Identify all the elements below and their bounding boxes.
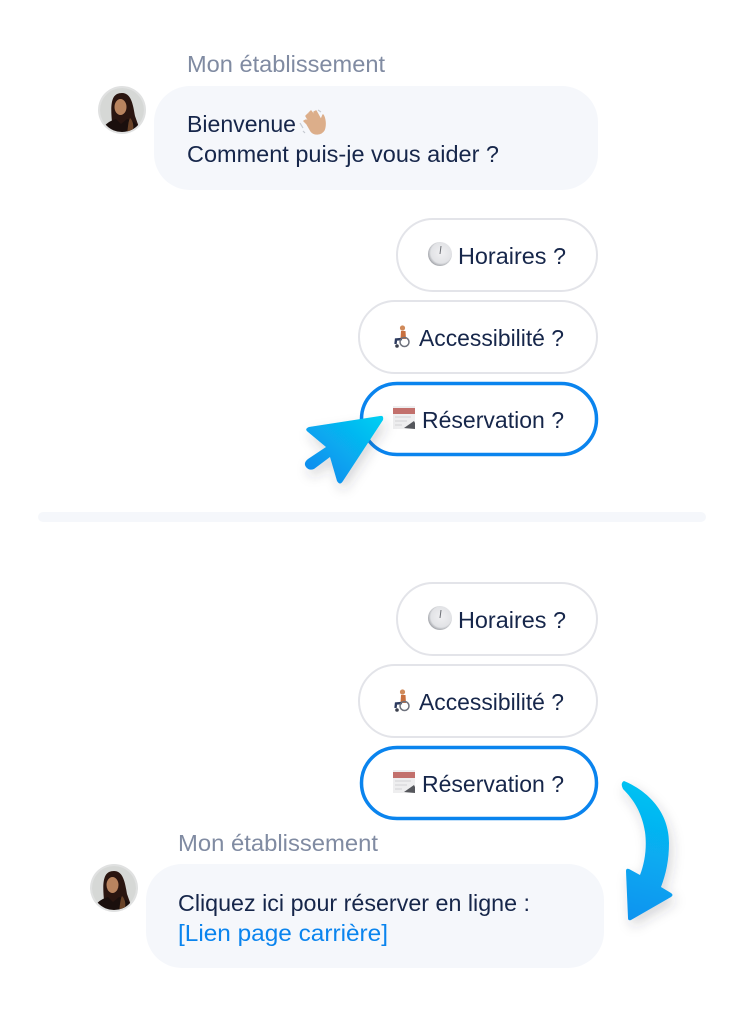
sender label: bottom conversation: Mon établissement	[178, 830, 379, 856]
label: Accessibilité: Accessibilité ?	[419, 325, 564, 351]
avatar: top conversation	[98, 86, 146, 134]
divider	[38, 512, 706, 522]
quick reply: Horaires (bottom)	[397, 583, 597, 655]
icon: calendar	[393, 770, 415, 793]
label: Accessibilité: Accessibilité ?	[419, 689, 564, 715]
quick reply: Réservation (bottom, selected)	[362, 748, 596, 818]
quick reply: Réservation (top, selected)	[362, 384, 596, 454]
label: Horaires: Horaires ?	[458, 607, 566, 633]
arrow: cursor pointer	[305, 416, 383, 484]
message bubble: welcome	[154, 86, 598, 190]
sender label: top conversation: Mon établissement	[187, 51, 386, 77]
welcome text line 1: Bienvenue	[187, 111, 296, 137]
booking text: Cliquez ici pour réserver en ligne :	[178, 890, 530, 916]
quick reply: Horaires (top)	[397, 219, 597, 291]
avatar: bottom conversation	[90, 864, 138, 912]
icon: clock	[428, 606, 452, 630]
icon: wheelchair person	[395, 689, 409, 712]
icon: clock	[428, 242, 452, 266]
label: Réservation: Réservation ?	[422, 407, 564, 433]
welcome text line 2: Comment puis-je vous aider ?	[187, 141, 499, 167]
label: Réservation: Réservation ?	[422, 771, 564, 797]
message bubble: booking link	[146, 864, 604, 968]
icon: wheelchair person	[395, 325, 409, 348]
icon: waving hand	[300, 110, 325, 134]
booking link: [Lien page carrière]	[178, 920, 388, 946]
quick reply: Accessibilité (top)	[359, 301, 597, 373]
quick reply: Accessibilité (bottom)	[359, 665, 597, 737]
label: Horaires: Horaires ?	[458, 243, 566, 269]
icon: calendar	[393, 406, 415, 429]
arrow: curved down arrow	[622, 781, 672, 920]
